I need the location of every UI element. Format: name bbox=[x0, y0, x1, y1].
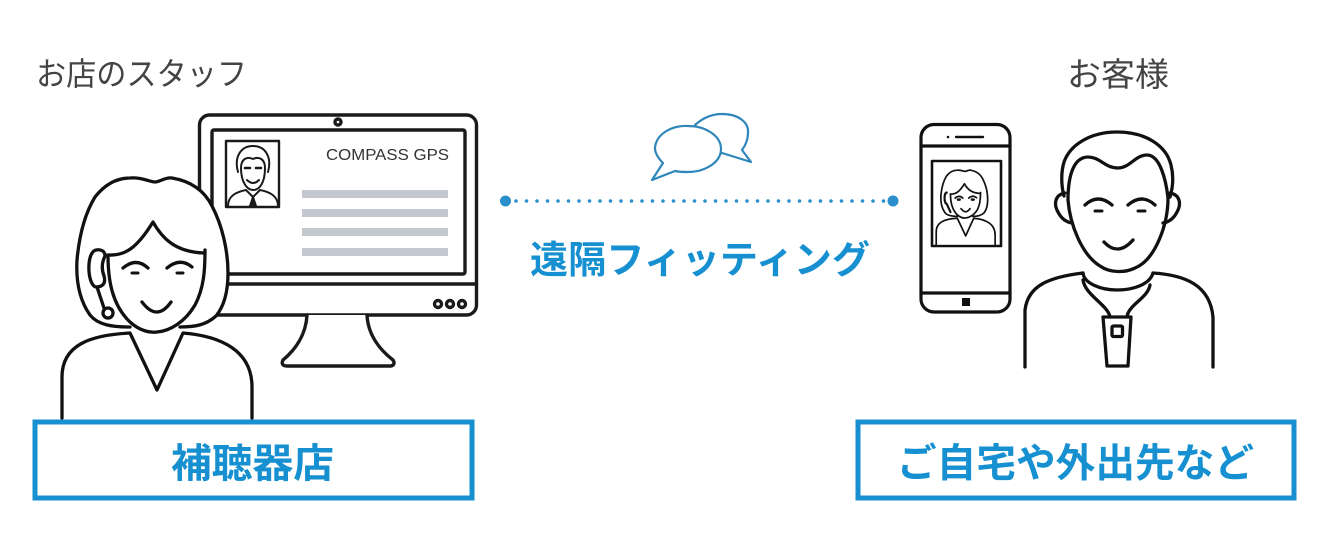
hearing device bbox=[1103, 317, 1131, 366]
staff photo on the phone bbox=[936, 170, 995, 245]
smile bbox=[1104, 240, 1133, 249]
icon: desktop monitor bbox=[200, 115, 476, 366]
hair outline bbox=[1062, 132, 1173, 197]
heading: remote fitting: 遠隔フィッティング bbox=[530, 240, 870, 282]
staff photo on the monitor bbox=[226, 141, 279, 207]
monitor brand text: COMPASS GPS bbox=[326, 147, 449, 164]
person: customer with hearing device bbox=[1025, 132, 1213, 367]
body bbox=[1025, 273, 1213, 367]
eyes bbox=[132, 272, 183, 274]
label: お店のスタッフ: お店のスタッフ bbox=[36, 56, 247, 92]
monitor text lines bbox=[302, 190, 448, 256]
box: hearing aid shop bbox=[35, 422, 472, 498]
eyes bbox=[1095, 210, 1145, 212]
headset bbox=[89, 250, 113, 318]
eyebrows bbox=[1085, 199, 1155, 205]
person: shop staff with headset bbox=[62, 178, 252, 418]
box label: ご自宅や外出先など bbox=[897, 442, 1254, 486]
label: お客様: お客様 bbox=[1067, 56, 1169, 93]
box label: 補聴器店 bbox=[171, 442, 334, 486]
icon: speech bubbles bbox=[652, 114, 751, 180]
ears bbox=[1056, 193, 1179, 223]
box: home and outside bbox=[858, 422, 1294, 498]
icon: smartphone bbox=[921, 124, 1010, 312]
hairline and face bbox=[1068, 155, 1168, 272]
dotted connection line bbox=[500, 196, 898, 206]
collar and lanyard bbox=[1083, 273, 1153, 290]
